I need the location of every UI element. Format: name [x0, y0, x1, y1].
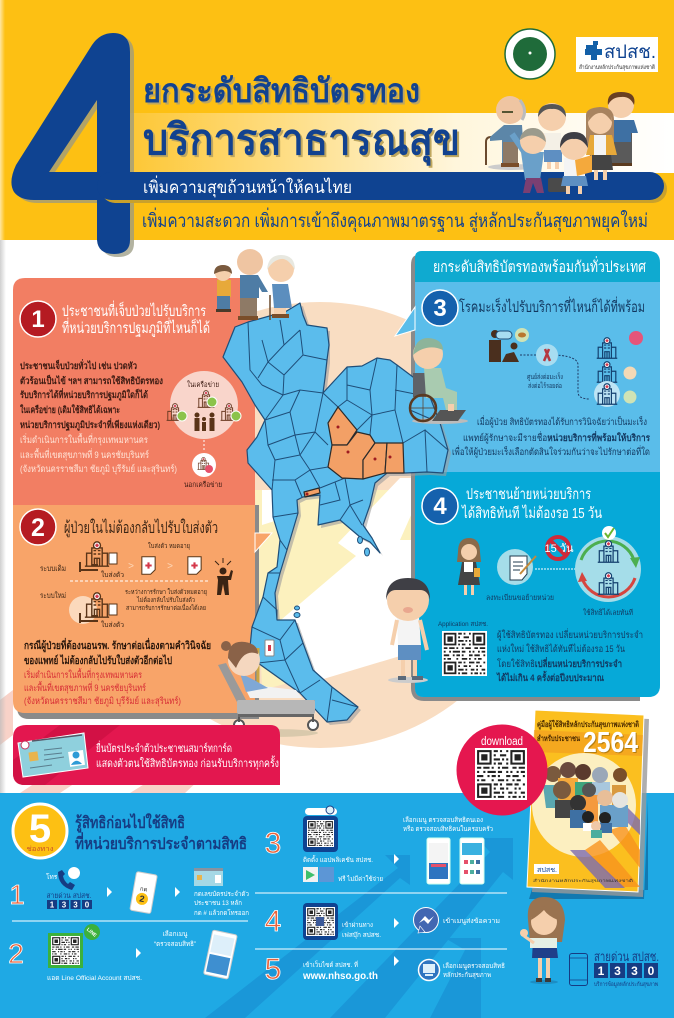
no 15 days wait sign — [544, 537, 574, 559]
panel 2 speech tail — [255, 533, 272, 552]
channel 5: website: หลักประกันสุขภาพ — [443, 971, 491, 979]
hotline block: 3 — [631, 964, 638, 978]
channel 1: hotline: กดเลขบัตรประจำตัว — [194, 890, 249, 898]
woman registering — [457, 538, 481, 595]
panel 1 heading: ที่หน่วยบริการปฐมภูมิที่ไหนก็ได้ — [62, 317, 210, 337]
panel 1 body text: รับบริการได้ที่หน่วยบริการปฐมภูมิใดก็ได้ — [20, 387, 148, 402]
divider row 1 — [12, 920, 248, 922]
panel 1 start note: และพื้นที่เขตสุขภาพที่ 9 นครชัยบุรินทร์ — [20, 448, 149, 461]
app phones — [427, 838, 484, 884]
section 5 badge: ช่องทาง — [26, 846, 54, 853]
callout: smart card notice — [13, 725, 280, 785]
hotline block: 0 — [648, 964, 655, 978]
hotline digits — [47, 900, 92, 910]
download qr badge — [456, 724, 548, 816]
section 4 body text — [496, 628, 643, 684]
new system flow: สามารถรับการรักษาต่อเนื่องได้เลย — [126, 603, 206, 612]
section 5 heading — [75, 813, 247, 853]
panel 1 heading — [62, 300, 210, 337]
suitcase — [548, 178, 570, 192]
old system flow: ใบส่งตัว หมดอายุ — [148, 542, 190, 550]
new system flow: ไม่ต้องกลับไปรับใบส่งตัว — [136, 596, 195, 604]
id card icon — [18, 733, 88, 777]
channel 5: website: เข้าเว็บไซต์ สปสช. ที่ — [303, 960, 358, 969]
illustration: patient on bed — [218, 640, 318, 737]
section 5 heading: ที่หน่วยบริการประจำตามสิทธิ — [75, 832, 247, 853]
channel 1: hotline: ประชาชน 13 หลัก — [194, 899, 242, 907]
section 4 body text: แห่งใหม่ ใช้สิทธิได้ทันทีไม่ต้องรอ 15 วัน — [497, 643, 625, 655]
guidebook cover: สำนักงานหลักประกันสุขภาพแห่งชาติ — [533, 878, 634, 884]
long haired girl — [586, 107, 617, 180]
channel 5: website: 5 — [265, 953, 281, 986]
callout text: ยื่นบัตรประจำตัวประชาชนสมาร์ทการ์ด — [96, 740, 232, 755]
guidebook cover: สำหรับประชาชน — [537, 734, 580, 743]
unit switch diagram — [575, 526, 641, 617]
panel 1 body text: ประชาชนเจ็บป่วยทั่วไป เช่น ปวดหัว — [20, 358, 137, 372]
illustration: man in wheelchair — [410, 338, 468, 424]
channel 5: website: เลือกเมนูตรวจสอบสิทธิ — [443, 962, 505, 970]
application qr code: Application สปสช. — [438, 621, 488, 628]
hotline digits: 1 — [50, 900, 55, 910]
illustration: elderly couple and child — [214, 249, 295, 320]
logo: NHSO: สำนักงานหลักประกันสุขภาพแห่งชาติ — [579, 64, 655, 71]
hotline digits: 0 — [85, 900, 90, 910]
divider arrow — [70, 580, 208, 582]
illustration: group of thai people — [486, 92, 638, 194]
panel 1 body text: ตัวร้อนเป็นไข้ ฯลฯ สามารถใช้สิทธิบัตรทอง — [20, 374, 163, 387]
hotline digits: 3 — [73, 900, 78, 910]
panel: nationwide (3 and 4) — [411, 251, 660, 701]
panel 1 start note: เริ่มดำเนินการในพื้นที่กรุงเทพมหานคร — [20, 433, 148, 446]
subtitle in bar: เพิ่มความสุขถ้วนหน้าให้คนไทย — [143, 175, 352, 198]
channel 2: line official: “ตรวจสอบสิทธิ” — [154, 940, 196, 948]
panel 2 bold text — [24, 637, 211, 667]
registration form icon — [486, 549, 554, 602]
channel 4: facebook: เฟสบุ๊ก สปสช. — [342, 931, 381, 939]
number badge 3 — [422, 290, 458, 326]
highlighted provinces — [304, 407, 404, 497]
book cover people — [543, 762, 628, 838]
channel 4: facebook: เข้าผ่านทาง — [342, 921, 373, 929]
panel 1 body text: ในเครือข่าย (เดิมใช้สิทธิได้เฉพาะ — [20, 404, 120, 416]
girl with folder — [560, 132, 592, 194]
old man — [486, 96, 536, 170]
section 4 body text: ได้ไม่เกิน 4 ครั้งต่อปีงบประมาณ — [496, 670, 604, 684]
phone press 2: 2 — [139, 894, 145, 904]
panel 1 body text: หน่วยบริการปฐมภูมิประจำที่เพียงแห่งเดียว) — [20, 417, 160, 432]
old system flow: ระบบเดิม — [40, 564, 66, 573]
panel 2 start note: และพื้นที่เขตสุขภาพที่ 9 นครชัยบุรินทร์ — [24, 681, 146, 694]
channel 2: line official: 2 — [8, 938, 24, 969]
book logo — [534, 864, 559, 874]
panel 2 heading: ผู้ป่วยในไม่ต้องกลับไปรับใบส่งตัว — [64, 518, 218, 538]
phone press 2: กด — [139, 886, 148, 894]
province markers — [306, 426, 392, 496]
channel 4: facebook: 4 — [265, 905, 281, 938]
new system flow: ระบบใหม่ — [40, 591, 66, 600]
grandma — [512, 128, 546, 193]
new system flow — [40, 588, 207, 629]
guidebook cover — [527, 710, 649, 899]
panel 2 bold text: ของแพทย์ ไม่ต้องกลับไปรับใบส่งตัวอีกต่อไป — [24, 653, 172, 667]
hotline block — [570, 949, 659, 988]
application qr code — [438, 621, 488, 676]
channel 2: line official: แอด Line Official Account สปสช. — [47, 975, 142, 982]
section 5 heading: รู้สิทธิก่อนไปใช้สิทธิ — [75, 813, 185, 834]
channel 2: line official: LINE — [85, 927, 98, 939]
channel 4: facebook: เข้าเมนูส่งข้อความ — [443, 917, 500, 925]
section 3 body text — [452, 415, 651, 458]
divider row 3 — [255, 892, 507, 894]
guidebook cover: 2564 — [583, 727, 638, 759]
no 15 days wait sign: 15 วัน — [544, 543, 574, 555]
old system flow: > — [128, 561, 134, 572]
channel 3: nhso app: 3 — [265, 827, 281, 860]
panel 2 start note: (จังหวัดนครราชสีมา ชัยภูมิ บุรีรัมย์ และสุรินทร์) — [24, 695, 181, 707]
map provinces base — [223, 303, 448, 722]
channel 2: line official — [8, 924, 237, 982]
number badge 3: 3 — [433, 295, 447, 322]
channel 3: nhso app — [265, 806, 493, 884]
section 3 body text: แพทย์ผู้รักษาจะมีรายชื่อหน่วยบริการที่พร้อมให้บริการ — [463, 430, 651, 444]
section 4 heading — [461, 486, 602, 522]
channel 3: nhso app: เลือกเมนู ตรวจสอบสิทธิตนเอง — [403, 816, 483, 824]
channel 1: hotline: กด # แล้วกดโทรออก — [194, 909, 249, 917]
divider row 4 — [255, 948, 507, 950]
section 5 badge: 5 — [29, 807, 51, 851]
panel 1 heading: ประชาชนที่เจ็บป่วยไปรับบริการ — [62, 300, 206, 320]
new system flow: ระหว่างการรักษา ใบส่งตัวหมดอายุ — [125, 588, 207, 596]
grandmother — [267, 255, 295, 320]
frustrated person icon — [215, 558, 233, 595]
number badge 1 — [20, 301, 56, 337]
grandfather — [237, 249, 268, 320]
monitor icon — [418, 960, 440, 980]
old system flow: ใบส่งตัว — [101, 570, 124, 579]
panel 2 bold text: กรณีผู้ป่วยที่ต้องนอนรพ. รักษาต่อเนื่องตามคำวินิจฉัย — [24, 637, 211, 653]
old system flow: > — [167, 561, 173, 572]
channel 3: nhso app: ฟรี ไม่มีค่าใช้จ่าย — [338, 875, 383, 883]
cancer referral diagram: ศูนย์ส่งต่อมะเร็ง — [527, 372, 563, 381]
channel 5: website: www.nhso.go.th — [302, 971, 378, 982]
channel 1: hotline: สายด่วน สปสช. — [46, 891, 92, 900]
navy title bar — [97, 172, 667, 203]
illustration: call center woman — [520, 897, 565, 984]
panel 2 start note — [24, 668, 181, 707]
id card small — [194, 868, 223, 886]
network diagram — [167, 371, 241, 489]
thailand map — [223, 303, 451, 725]
panel 2 start note: เริ่มดำเนินการในพื้นที่กรุงเทพมหานคร — [24, 668, 142, 681]
channel 2: line official: เลือกเมนู — [162, 930, 188, 938]
book logo: สปสช. — [537, 867, 557, 874]
logo: ministry of public health — [505, 29, 555, 79]
network diagram: ในเครือข่าย — [187, 380, 219, 389]
phone press 2 — [130, 872, 157, 914]
callout text: แสดงตัวตนใช้สิทธิบัตรทอง ก่อนรับบริการทุกครั้ง — [96, 755, 279, 770]
panel: service anywhere (1) — [13, 278, 255, 505]
section 5 badge — [13, 804, 67, 858]
hotline block: 1 — [598, 964, 605, 978]
channel 3: nhso app: หรือ ตรวจสอบสิทธิคนในครอบครัว — [403, 825, 493, 833]
download qr badge: download — [481, 736, 523, 748]
number badge 2 — [20, 509, 56, 545]
man — [605, 92, 638, 166]
channel 1: hotline: โทร — [46, 873, 58, 881]
panel 1 start note — [20, 433, 177, 475]
line phone — [203, 930, 237, 979]
registration form icon: ลงทะเบียนขอย้ายหน่วย — [486, 593, 554, 602]
hotline block: บริการข้อมูลหลักประกันสุขภาพ — [594, 981, 658, 988]
panel 1 body text — [20, 358, 163, 432]
section 4 heading: ประชาชนย้ายหน่วยบริการ — [466, 486, 591, 503]
panel: no referral letter (2) — [13, 505, 259, 719]
callout text — [96, 740, 279, 770]
number badge 1: 1 — [31, 306, 45, 333]
hotline block: 3 — [614, 964, 621, 978]
channel 1: hotline: 1 — [9, 879, 25, 910]
illustration: boy with phone — [386, 578, 430, 683]
number badge 4: 4 — [433, 493, 447, 520]
map shadow — [226, 306, 451, 725]
panel 1 start note: (จังหวัดนครราชสีมา ชัยภูมิ บุรีรัมย์ และสุรินทร์) — [20, 463, 177, 475]
messenger icon — [414, 908, 438, 933]
section 4 heading: ได้สิทธิทันที ไม่ต้องรอ 15 วัน — [461, 504, 602, 522]
title: ยกระดับสิทธิบัตรทอง — [143, 72, 420, 109]
logo: NHSO — [576, 37, 658, 72]
section 4 body text: โดยใช้สิทธิเปลี่ยนหน่วยบริการประจำ — [497, 656, 622, 670]
boy — [538, 103, 566, 169]
book title: คู่มือผู้ใช้สิทธิหลักประกันสุขภาพแห่งชาติ — [537, 719, 639, 730]
channel 4: facebook — [265, 903, 500, 940]
child — [214, 265, 232, 312]
cancer referral diagram — [489, 328, 643, 407]
title: บริการสาธารณสุข — [143, 116, 460, 166]
old system flow — [40, 542, 201, 579]
unit switch diagram: ใช้สิทธิได้เลยทันที — [583, 608, 633, 617]
bottom section arrow pattern — [205, 838, 513, 1018]
channel 1: hotline — [9, 867, 249, 917]
title — [143, 72, 460, 166]
hotline digits: 3 — [62, 900, 67, 910]
province boundaries — [248, 320, 448, 722]
channel 3: nhso app: ติดตั้ง แอปพลิเคชัน สปสช. — [303, 855, 373, 864]
cancer referral diagram: ส่งต่อไร้รอยต่อ — [528, 381, 562, 390]
big number 4 — [11, 33, 134, 257]
number badge 2: 2 — [31, 514, 45, 542]
panel 3 speech tail — [395, 307, 415, 336]
network diagram: นอกเครือข่าย — [184, 480, 222, 489]
section 4 body text: ผู้ใช้สิทธิบัตรทอง เปลี่ยนหน่วยบริการประจำ — [497, 628, 643, 641]
logo: NHSO: สปสช. — [604, 42, 656, 63]
channel 5: website — [265, 953, 505, 986]
number badge 4 — [422, 488, 458, 524]
islands — [294, 536, 370, 618]
new system flow: ใบส่งตัว — [101, 620, 124, 629]
